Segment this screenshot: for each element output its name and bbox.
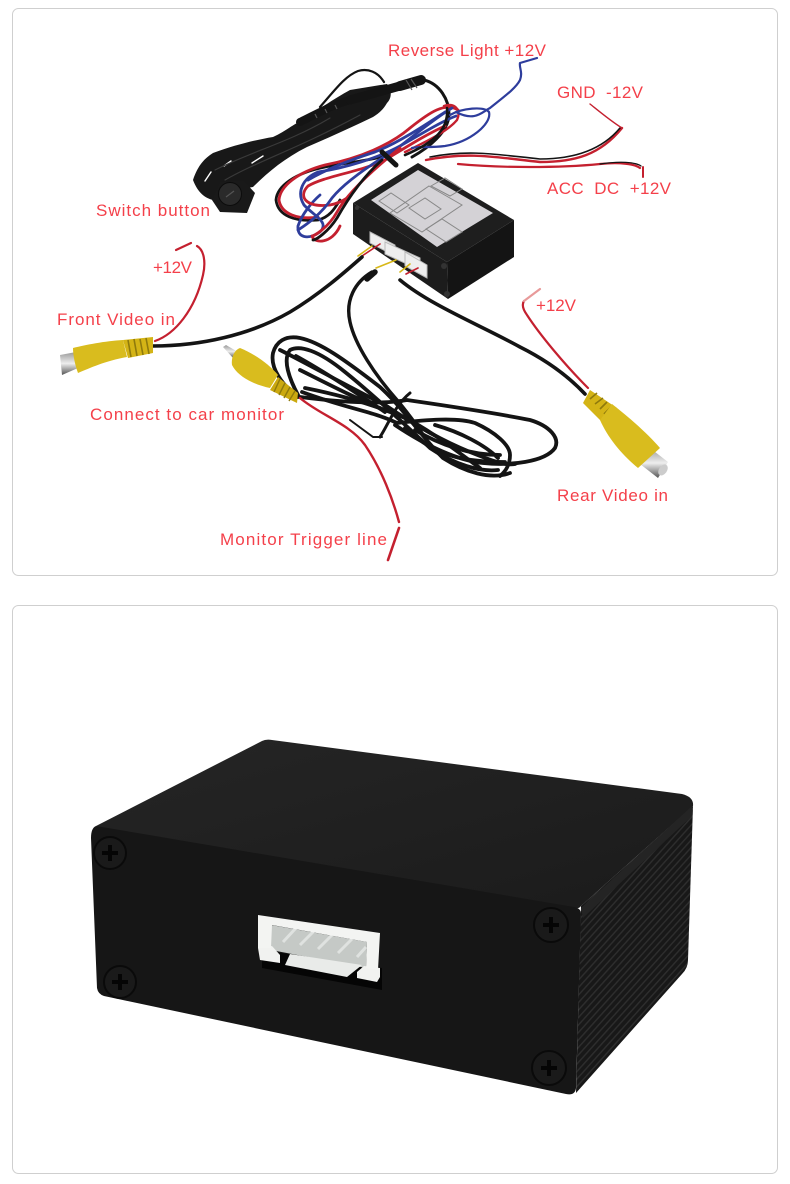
screw: bottom left — [104, 966, 136, 998]
trigger wire end — [388, 528, 399, 560]
panel: box close-up — [12, 606, 778, 1174]
red +12V wire, front — [155, 246, 204, 341]
white connector — [258, 915, 382, 990]
label: +12V rear: +12V — [536, 296, 577, 315]
label: Front Video in: Front Video in — [57, 310, 175, 329]
switch cable coil — [193, 70, 391, 200]
panel: wiring diagram — [12, 8, 778, 576]
wire stub, rear — [524, 289, 540, 301]
label: Rear Video in: Rear Video in — [557, 486, 668, 505]
GND and ACC power wires — [426, 104, 643, 177]
icon: front RCA connector — [60, 337, 153, 375]
label: +12V front: +12V — [153, 258, 193, 277]
connector plug — [300, 79, 421, 122]
wire bundle — [276, 58, 537, 241]
top face — [96, 740, 693, 908]
box connectors and pigtails — [358, 232, 427, 278]
rear video cable — [400, 280, 585, 394]
label: Switch button: Switch button — [96, 201, 210, 220]
side face with ribs — [576, 806, 693, 1093]
metal enclosure — [91, 740, 693, 1094]
switch cable to box — [412, 80, 449, 157]
screw: top left — [94, 837, 126, 869]
screw: bottom right — [532, 1051, 566, 1085]
monitor trigger wire — [300, 398, 399, 522]
label: Connect to car monitor: Connect to car monitor — [90, 405, 284, 424]
red +12V wire, rear — [523, 301, 588, 388]
wire stub — [176, 243, 191, 250]
label: Reverse Light +12V: Reverse Light +12V — [388, 41, 547, 60]
monitor output cable coil — [273, 272, 556, 476]
icon: switch button — [212, 180, 255, 213]
icon: rear RCA connector — [583, 390, 670, 478]
box label — [371, 170, 493, 247]
label: ACC DC +12V: ACC DC +12V — [547, 179, 672, 198]
label: GND -12V: GND -12V — [557, 83, 644, 102]
icon: monitor RCA connector — [223, 345, 298, 403]
label: Monitor Trigger line: Monitor Trigger line — [220, 530, 387, 549]
chamfer — [581, 806, 692, 918]
screw: top right — [534, 908, 568, 942]
front face — [91, 826, 581, 1094]
front video cable — [153, 257, 362, 346]
control box — [353, 163, 514, 299]
